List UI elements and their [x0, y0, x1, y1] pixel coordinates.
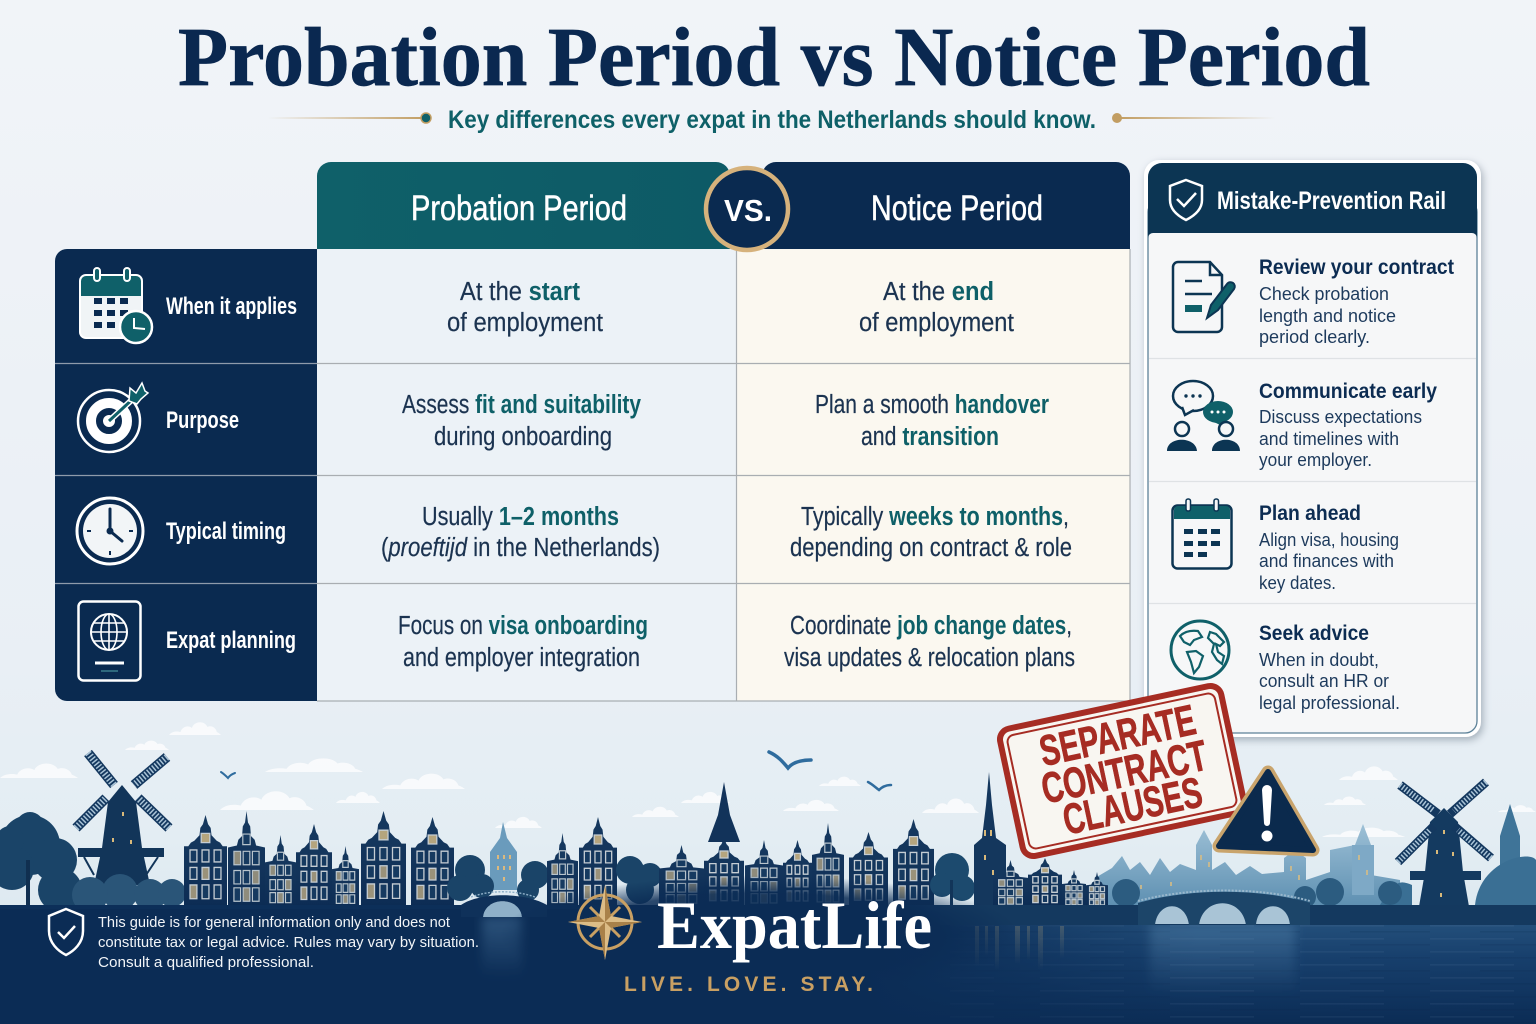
rail item: review your contract: length and notice — [1259, 306, 1396, 326]
row: when it applies — [447, 278, 1014, 337]
label: when it applies: When it applies — [166, 293, 297, 320]
row: expat planning: visa updates & relocation plans — [784, 644, 1075, 672]
row: typical timing — [381, 503, 1072, 562]
icon: passport — [78, 602, 140, 680]
rail item: review your contract: Check probation — [1259, 284, 1389, 304]
label: expat planning: Expat planning — [166, 627, 296, 654]
stamp: separate contract clauses: CLAUSES — [1059, 768, 1207, 845]
icon: shield — [49, 909, 83, 955]
header: notice: Notice Period — [871, 189, 1043, 228]
row: expat planning: and employer integration — [403, 644, 640, 672]
row: purpose: Plan a smooth handover — [815, 391, 1049, 419]
rail item: communicate early: and timelines with — [1259, 429, 1399, 449]
icon: globe — [1171, 621, 1229, 679]
row: purpose: and transition — [861, 423, 999, 451]
water — [0, 905, 1536, 1024]
clouds — [0, 722, 1536, 837]
rail item: seek advice: legal professional. — [1259, 693, 1400, 713]
canal houses center — [547, 782, 934, 907]
canal houses left — [184, 811, 549, 907]
rail item: review your contract: period clearly. — [1259, 327, 1370, 347]
bridge right — [1138, 890, 1310, 925]
header: notice — [740, 162, 1130, 249]
church tower and houses right — [930, 772, 1402, 908]
rail item: review your contract: Review your contract — [1259, 256, 1454, 279]
row: when it applies: of employment — [859, 309, 1014, 337]
cell backgrounds — [317, 249, 1130, 701]
row: purpose: Assess fit and suitability — [402, 391, 642, 419]
rail item: plan ahead: Align visa, housing — [1259, 530, 1399, 550]
logo backdrop — [500, 875, 1020, 995]
row: expat planning — [398, 612, 1075, 672]
icon: target with arrow — [78, 383, 148, 452]
rail item: seek advice: consult an HR or — [1259, 671, 1389, 691]
stamp: separate contract clauses: CONTRACT — [1037, 732, 1212, 813]
mistake-prevention rail — [1144, 160, 1481, 737]
comparison table — [55, 162, 1130, 701]
icon: calendar with clock — [80, 268, 152, 343]
logo: expatlife: ExpatLife — [657, 887, 932, 963]
rail item: seek advice: When in doubt, — [1259, 650, 1379, 670]
stamp: separate contract clauses — [998, 684, 1246, 858]
rail item: communicate early: your employer. — [1259, 450, 1372, 470]
disclaimer: This guide is for general information only and does not — [98, 914, 451, 931]
logo: expatlife — [568, 885, 932, 996]
stamp: separate contract clauses: SEPARATE — [1035, 696, 1200, 776]
rail item: communicate early: Discuss expectations — [1259, 407, 1422, 427]
label: typical timing: Typical timing — [166, 518, 286, 545]
row: purpose — [402, 391, 1049, 451]
row label column — [55, 249, 317, 701]
vs badge — [706, 168, 788, 250]
subtitle with ornaments: Key differences every expat in the Netherlands should know. — [448, 106, 1096, 134]
vs badge: VS. — [724, 193, 772, 228]
row: when it applies: of employment — [447, 309, 603, 337]
header: probation — [317, 162, 730, 249]
row: when it applies: At the start — [460, 278, 580, 306]
rail item: plan ahead — [1172, 499, 1399, 593]
icon: calendar — [1172, 499, 1232, 568]
row: typical timing: Usually 1–2 months — [422, 503, 619, 531]
icon: compass — [568, 885, 642, 960]
rail header — [1148, 163, 1477, 238]
logo: expatlife: LIVE. LOVE. STAY. — [624, 973, 873, 996]
rail item: seek advice: Seek advice — [1259, 622, 1369, 645]
windmill left — [0, 753, 186, 913]
rail item: communicate early — [1167, 380, 1437, 470]
rail item: plan ahead: and finances with — [1259, 551, 1394, 571]
label: purpose: Purpose — [166, 407, 239, 434]
header: probation: Probation Period — [411, 189, 627, 228]
icon: two people talking — [1167, 381, 1240, 451]
title: Probation Period vs Notice Period — [178, 11, 1370, 104]
distant tower — [490, 822, 517, 890]
disclaimer: Consult a qualified professional. — [98, 954, 314, 971]
row: expat planning: Focus on visa onboarding — [398, 612, 648, 640]
row: expat planning: Coordinate job change dates, — [790, 612, 1072, 640]
rail item: seek advice — [1171, 621, 1400, 713]
rail item: communicate early: Communicate early — [1259, 380, 1437, 403]
row: typical timing: (proeftijd in the Netherlands) — [381, 534, 660, 562]
icon: shield — [1170, 180, 1202, 220]
warning triangle — [1219, 772, 1313, 850]
disclaimer: constitute tax or legal advice. Rules may vary by situation. — [98, 934, 479, 951]
row: purpose: during onboarding — [434, 423, 612, 451]
rail header: Mistake-Prevention Rail — [1217, 187, 1446, 215]
icon: clock — [77, 498, 143, 564]
icon: document and pencil — [1173, 262, 1235, 332]
row: typical timing: Typically weeks to months, — [801, 503, 1069, 531]
row: typical timing: depending on contract & role — [790, 534, 1072, 562]
rail item: plan ahead: key dates. — [1259, 573, 1336, 593]
bridge left — [461, 892, 547, 917]
distant city — [1095, 804, 1536, 907]
row: when it applies: At the end — [883, 278, 994, 306]
rail item: review your contract — [1173, 256, 1454, 347]
disclaimer — [49, 909, 479, 971]
birds — [221, 752, 891, 790]
windmill right — [1398, 782, 1491, 918]
rail item: plan ahead: Plan ahead — [1259, 502, 1361, 525]
